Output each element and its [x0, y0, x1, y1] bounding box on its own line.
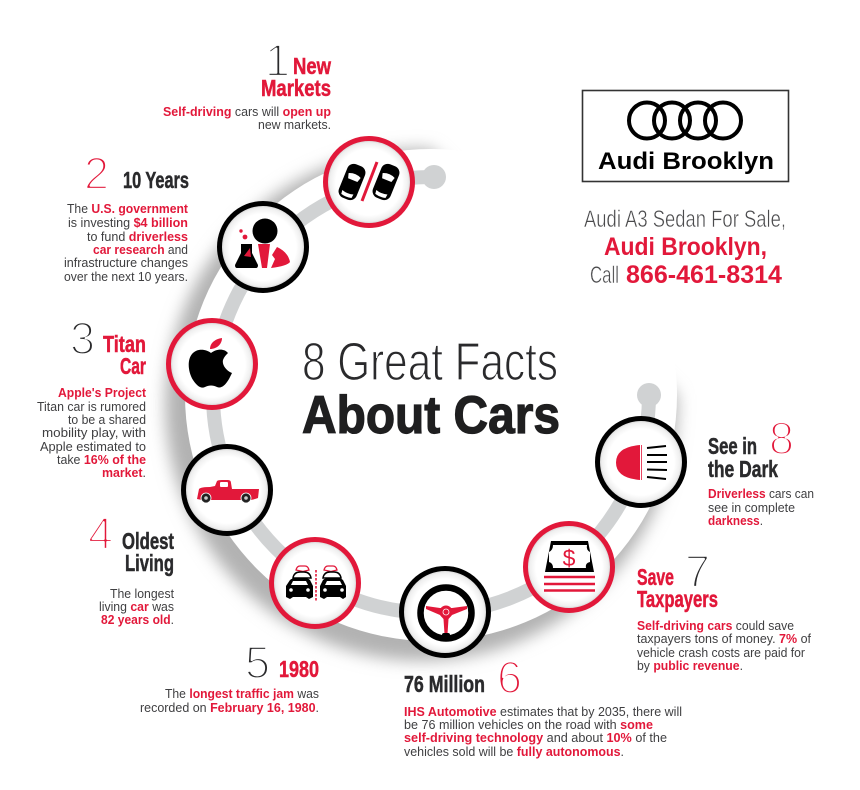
fact 6 text: vehicles sold will be fully autonomous. — [404, 745, 624, 759]
dealer call to action — [584, 206, 786, 289]
fact 6 text: self-driving technology and about 10% of the — [404, 731, 667, 745]
dealer call to action: Audi Brooklyn, — [604, 233, 767, 261]
fact 3 text: Titan — [103, 331, 146, 357]
fact 4 text: 82 years old. — [101, 613, 174, 627]
icon: two self-driving cars — [326, 138, 412, 226]
fact 3 text: mobility play, with — [42, 426, 146, 440]
fact 5 text: 1980 — [279, 656, 319, 682]
curved timeline track — [213, 165, 661, 613]
fact 7 text: Taxpayers — [637, 586, 718, 612]
fact 2 text: to fund driverless — [87, 230, 188, 244]
logo: Audi Brooklyn: Audi Brooklyn — [598, 148, 774, 175]
fact 4 text: Oldest — [122, 528, 174, 554]
fact 3 text: Titan car is rumored — [37, 400, 146, 414]
fact 7 text: vehicle crash costs are paid for — [637, 646, 805, 660]
icon: apple logo — [168, 320, 256, 408]
fact 3 text: take 16% of the — [57, 453, 146, 467]
fact 3 text — [37, 313, 147, 480]
title: About Cars — [302, 386, 560, 445]
fact 4 text — [88, 508, 175, 627]
fact 3 text: 3 — [70, 313, 95, 364]
fact 5 text — [140, 637, 319, 715]
fact 2 text: car research and — [93, 243, 188, 257]
fact 7 text: Self-driving cars could save — [637, 619, 794, 633]
fact 7 text — [637, 546, 812, 673]
title — [302, 332, 560, 445]
fact 6 text: be 76 million vehicles on the road with some — [404, 718, 653, 732]
dealer call to action: 866-461-8314 — [626, 261, 782, 289]
title: 8 Great Facts — [302, 332, 558, 392]
fact 8 text: Driverless cars can — [708, 487, 814, 501]
fact 2 text: is investing $4 billion — [68, 216, 188, 230]
fact 4 text: living car was — [99, 600, 174, 614]
icon: stack of money: $ — [563, 545, 576, 571]
fact 7 text: Save — [637, 564, 674, 590]
fact 3 text: Apple estimated to — [40, 440, 146, 454]
fact 6 text: 6 — [497, 652, 522, 703]
fact 4 text: Living — [125, 550, 174, 576]
fact 8 text: see in complete — [708, 501, 795, 515]
fact 8 text: See in — [708, 433, 757, 459]
logo: Audi Brooklyn — [582, 90, 788, 182]
icon: stack of money — [526, 524, 612, 610]
fact 4 text: The longest — [110, 587, 175, 601]
fact 1 text: Self-driving cars will open up — [163, 105, 331, 119]
dealer call to action: Call — [590, 262, 619, 289]
fact 4 text: 4 — [88, 508, 113, 559]
fact 8 text: darkness. — [708, 514, 763, 528]
icon: traffic jam — [272, 540, 358, 626]
fact 1 text — [163, 35, 331, 132]
fact 1 text: 1 — [265, 35, 290, 86]
fact 8 text: the Dark — [708, 456, 778, 482]
fact 2 text — [64, 148, 189, 284]
fact 2 text: 10 Years — [123, 167, 189, 193]
fact 5 text: The longest traffic jam was — [165, 687, 319, 701]
icon: steering wheel — [402, 568, 488, 656]
fact 2 text: over the next 10 years. — [64, 270, 188, 284]
fact 2 text: 2 — [84, 148, 109, 199]
fact 6 text — [404, 652, 682, 759]
fact 5 text: recorded on February 16, 1980. — [140, 701, 319, 715]
fact 3 text: Car — [120, 353, 146, 379]
icon: scientist with flask — [220, 204, 306, 290]
fact 2 text: The U.S. government — [67, 202, 189, 216]
fact 2 text: infrastructure changes — [64, 256, 188, 270]
fact 1 text: new markets. — [258, 118, 331, 132]
fact 3 text: to be a shared — [68, 413, 146, 427]
icon: headlight — [598, 418, 684, 506]
fact 8 text: 8 — [769, 413, 794, 464]
fact 6 text: 76 Million — [404, 671, 485, 697]
arc drop shadow — [165, 149, 677, 661]
fact 5 text: 5 — [245, 637, 270, 688]
fact 7 text: by public revenue. — [637, 659, 743, 673]
fact 6 text: IHS Automotive estimates that by 2035, there will — [404, 705, 682, 719]
fact 1 text: New — [293, 53, 331, 79]
fact 7 text: taxpayers tons of money. 7% of — [637, 632, 812, 646]
dealer call to action: Audi A3 Sedan For Sale, — [584, 206, 786, 233]
fact 3 text: Apple's Project — [58, 386, 147, 400]
fact 3 text: market. — [102, 466, 146, 480]
icon: vintage pickup truck — [184, 446, 270, 534]
fact 8 text — [708, 413, 814, 528]
fact 1 text: Markets — [261, 75, 331, 101]
fact 7 text: 7 — [685, 546, 710, 597]
